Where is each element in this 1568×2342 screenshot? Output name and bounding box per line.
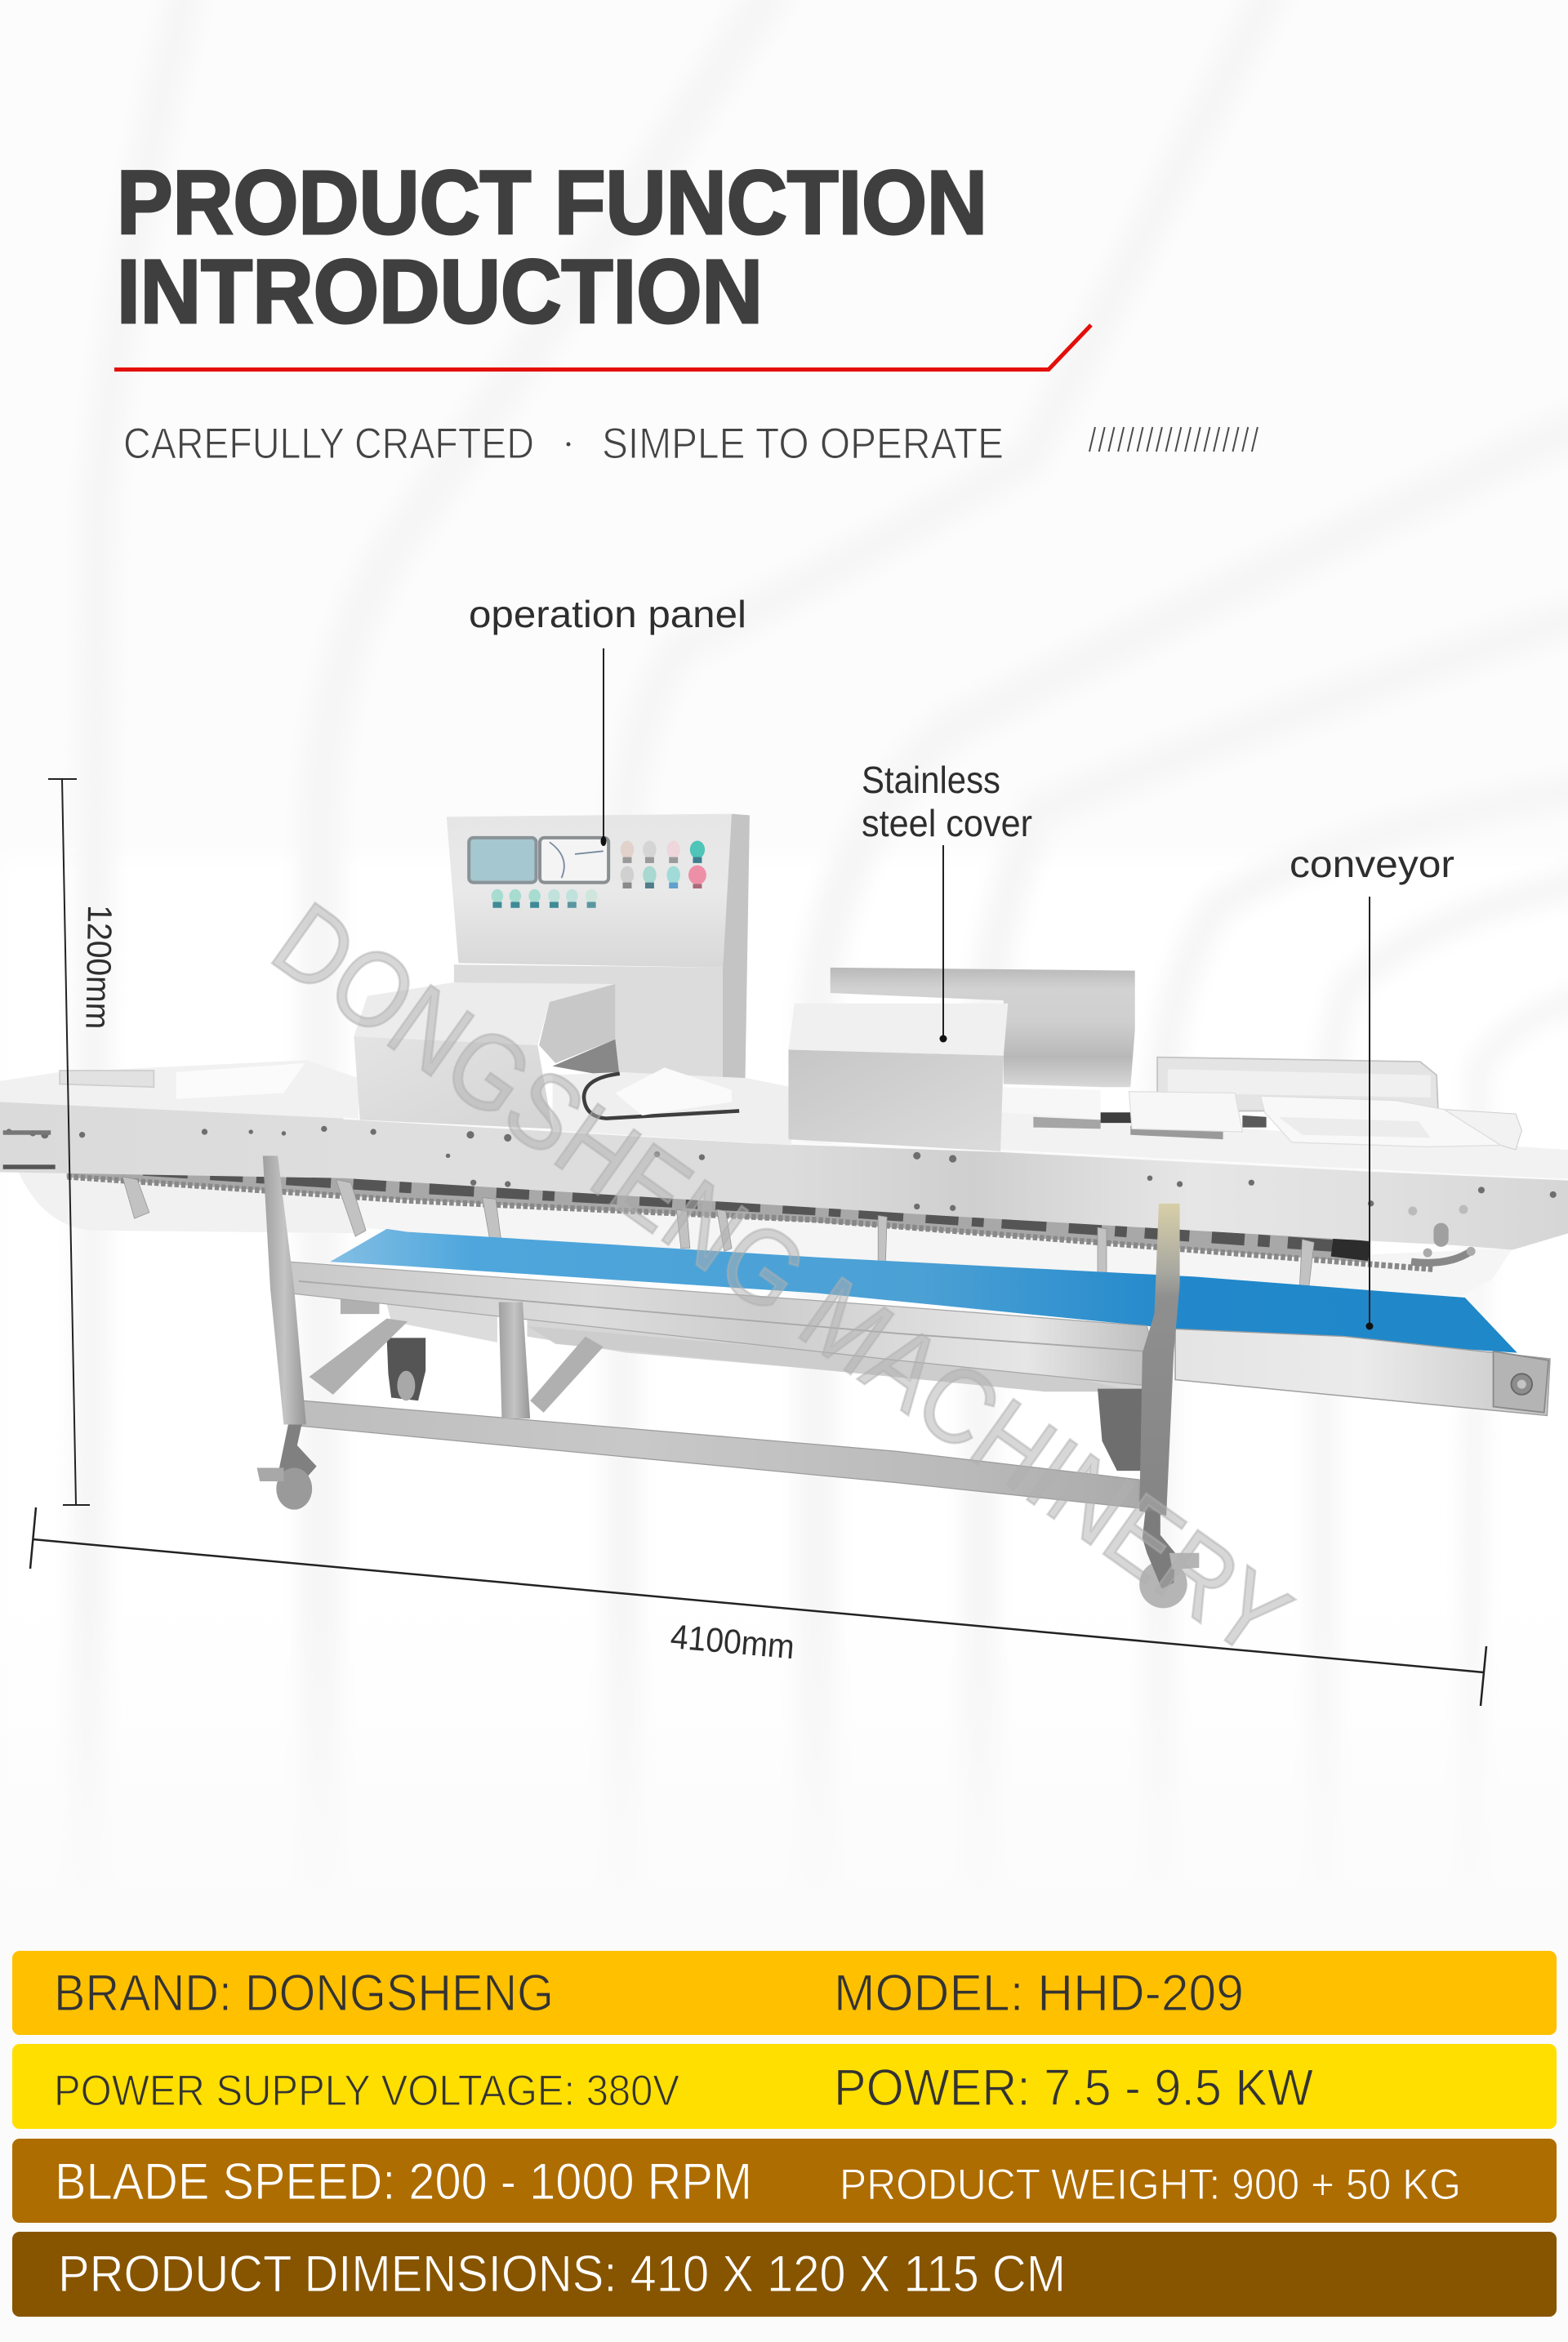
spec bar: blade speed and weight: BLADE SPEED: 200 - 1000 RPM [55, 2153, 752, 2211]
machine: hood box [354, 982, 615, 1129]
machine illustration [0, 814, 1568, 1680]
machine: back cover [831, 968, 1135, 1087]
spec bar: blade speed and weight [12, 2139, 1557, 2223]
red accent line [114, 325, 1091, 369]
callout: stainless steel cover: Stainless [862, 759, 1000, 801]
machine: main beam [0, 1102, 1568, 1250]
machine: conveyor right frame [1175, 1329, 1550, 1415]
spec bar: voltage and power: POWER SUPPLY VOLTAGE: 380V [54, 2067, 680, 2115]
machine: beam bolts [3, 1126, 1557, 1258]
machine: front casters [257, 1424, 1199, 1608]
dimension: height 1200mm [48, 779, 119, 1505]
spec bar: brand and model [12, 1951, 1557, 2035]
machine: control buttons [492, 840, 706, 908]
machine: beam outline highlights [344, 1119, 1568, 1180]
machine: chain strip [67, 1164, 1471, 1269]
dimension: length 4100mm [30, 1507, 1486, 1706]
callout: conveyor: conveyor [1290, 843, 1454, 885]
title [117, 153, 987, 342]
machine: operation panel housing [447, 814, 750, 1083]
callout: conveyor [1290, 843, 1454, 1329]
machine: control screens [469, 838, 608, 883]
machine: cable and foot switch [584, 1067, 739, 1119]
machine: left underside white curve [18, 1171, 366, 1233]
spec bar: dimensions [12, 2232, 1557, 2317]
title: INTRODUCTION [117, 242, 763, 342]
machine: frame uprights and braces [263, 1155, 1180, 1516]
spec bar: voltage and power [12, 2044, 1557, 2129]
machine: white plastic strip [359, 1195, 1512, 1296]
spec bar: brand and model: BRAND: DONGSHENG [54, 1965, 554, 2022]
machine: lower trays [341, 1287, 1147, 1391]
dimension: height 1200mm: 1200mm [78, 905, 119, 1030]
dimension: length 4100mm: 4100mm [669, 1617, 796, 1666]
callout: stainless steel cover: steel cover [862, 802, 1032, 844]
subtitle: CAREFULLY CRAFTED [123, 420, 534, 468]
title: PRODUCT FUNCTION [117, 153, 987, 253]
subtitle [123, 420, 1004, 468]
subtitle: SIMPLE TO OPERATE [602, 420, 1004, 468]
callout: stainless steel cover [862, 759, 1032, 1042]
watermark: DONGSHENG MACHINERY [252, 879, 1311, 1680]
machine: top right parts [1000, 1057, 1568, 1180]
machine: centre white deck [553, 1072, 791, 1146]
callout: operation panel [469, 593, 746, 846]
spec bar: blade speed and weight: PRODUCT WEIGHT: 900 + 50 KG [840, 2161, 1461, 2209]
spec bar: dimensions: PRODUCT DIMENSIONS: 410 X 120 X 115 CM [58, 2246, 1066, 2303]
machine: front rail crease [299, 1281, 1147, 1351]
machine: stainless steel front cover [788, 1004, 1008, 1151]
spec bar: voltage and power: POWER: 7.5 - 9.5 KW [834, 2059, 1314, 2117]
hatch decoration [1089, 427, 1258, 452]
machine: front rail [288, 1262, 1153, 1386]
machine: frame bottom rail [301, 1400, 1139, 1508]
machine: blue conveyor belt [330, 1229, 1517, 1353]
machine: brackets [122, 1177, 1314, 1293]
machine: inner motor and caster [387, 1338, 1144, 1471]
machine: left white cover [0, 1060, 359, 1123]
spec bar: brand and model: MODEL: HHD-209 [834, 1965, 1244, 2022]
callout: operation panel: operation panel [469, 593, 746, 635]
